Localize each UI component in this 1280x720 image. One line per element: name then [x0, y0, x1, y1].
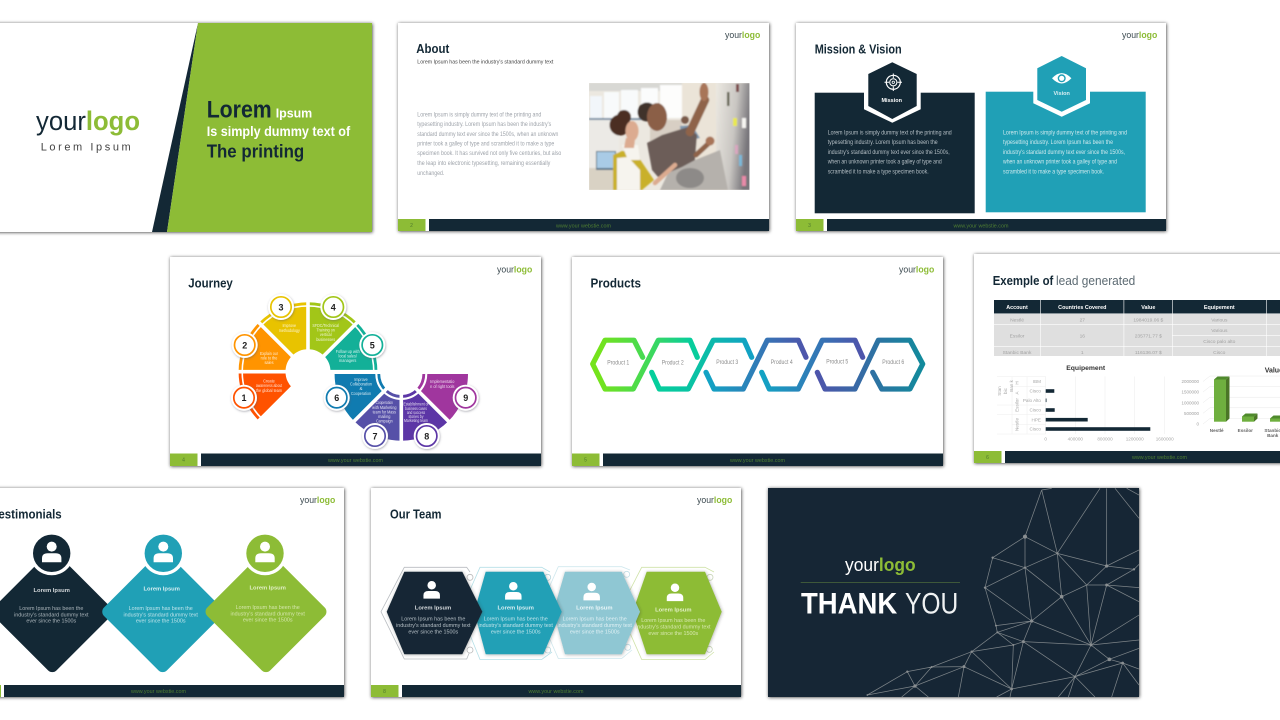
panel: vision: [986, 56, 1146, 212]
step captions: business cases: [405, 406, 427, 411]
teal diamond card: ever since the 1500s: [136, 619, 186, 625]
step captions: mailing: [378, 414, 391, 419]
team footer: [371, 685, 741, 697]
green team card: ever since the 1500s: [648, 631, 698, 637]
equipement bar chart: bic: [1003, 387, 1008, 394]
products footer: [572, 454, 943, 466]
panel: mission: [815, 62, 975, 213]
lead footer: www.your webstie.com: [1131, 455, 1187, 461]
mission footer: www.your webstie.com: [953, 223, 1009, 229]
equipement bar chart: 1200000: [1126, 437, 1144, 442]
leads table: 27: [1080, 318, 1085, 324]
product labels: Product 2: [662, 361, 684, 367]
step 5 badge: 5: [370, 340, 375, 350]
cover green panel: [167, 23, 372, 232]
step captions: awareness about: [256, 383, 283, 388]
dark diamond card: Lorem Ipsum: [33, 588, 70, 594]
step captions: businesses: [316, 337, 336, 342]
equipement bar chart: 0: [1044, 437, 1047, 442]
testimonials footer: [0, 685, 344, 697]
equipement bar chart: H: [1014, 381, 1020, 385]
slide 4: journey: [170, 257, 541, 466]
step captions: [256, 323, 455, 424]
journey diagram: nine-step S-curve: [231, 294, 479, 449]
step captions: vertical: [320, 332, 332, 337]
slide 6: lead generated: [974, 254, 1280, 463]
journey footer: www.your webstie.com: [327, 458, 383, 464]
step captions: managers: [339, 358, 357, 363]
value 3d column chart: 1000000: [1181, 400, 1199, 405]
icon: person: [505, 582, 522, 600]
green team card: Lorem Ipsum has been the: [641, 618, 705, 624]
step 4 badge: [320, 294, 346, 320]
lead title: Exemple of: [993, 273, 1054, 288]
step captions: Improve: [354, 377, 368, 382]
about photo: two colleagues at a wall: [589, 83, 750, 190]
cover headline: The printing: [207, 140, 304, 162]
teal diamond card: Lorem Ipsum: [143, 586, 180, 592]
mission title: Mission & Vision: [815, 41, 902, 56]
journey footer: 4: [182, 458, 185, 464]
slide 1: cover: [0, 23, 372, 232]
mission paragraph: industry's standard dummy text ever since the 1500s,: [828, 150, 950, 156]
lower ring steps 6 to 9: [335, 374, 468, 443]
icon: person: [42, 542, 61, 562]
equipement bar chart: Cisco: [1030, 427, 1041, 432]
product labels: Product 5: [826, 359, 849, 365]
step captions: Cooperation: [376, 400, 393, 405]
lead title: lead generated: [1056, 273, 1135, 288]
step 2 badge: [232, 332, 258, 358]
equipement bar chart: Nestle: [1014, 418, 1020, 431]
light blue team card: ever since the 1500s: [570, 629, 620, 635]
leads table: Stanbic Bank: [1003, 350, 1032, 356]
step captions: role to the: [261, 356, 278, 360]
icon: person: [667, 584, 683, 601]
thank you heading: YOU: [905, 588, 958, 620]
leads table: Account: [1006, 305, 1028, 311]
leads table: 116136.07 $: [1135, 350, 1162, 356]
step 8 badge: [414, 423, 440, 449]
testimonials logo: yourlogo: [300, 495, 335, 506]
journey title: Journey: [188, 276, 233, 290]
slide 5: products: [572, 257, 943, 466]
vision hexagon: [1037, 56, 1086, 112]
dark diamond card: industry's standard dummy text: [14, 612, 89, 618]
vision paragraph: Lorem Ipsum is simply dummy text of the printing and: [1003, 130, 1127, 136]
equipement bar chart: Cisco: [1030, 389, 1041, 394]
value 3d column chart: 0: [1196, 422, 1199, 427]
dark diamond card: [0, 531, 115, 675]
about logo: yourlogo: [725, 30, 760, 41]
green diamond card: Lorem Ipsum: [249, 586, 286, 592]
step captions: Explain our: [260, 351, 278, 356]
team footer: 8: [383, 689, 386, 695]
icon: target: [884, 74, 902, 91]
equipement bar chart: Ban k: [1009, 379, 1014, 392]
lead footer: [974, 451, 1280, 463]
vision paragraph: typesetting industry. Lorem Ipsum has been the: [1003, 140, 1114, 146]
equipement bar chart: HPE: [1032, 417, 1041, 422]
green team card: industry's standard dummy text: [636, 625, 711, 631]
step 3 badge: [268, 294, 294, 320]
about footer: 2: [410, 223, 413, 229]
leads table: Various: [1211, 328, 1228, 334]
green diamond card: industry's standard dummy text: [230, 611, 305, 617]
value 3d column chart: Essilor: [1238, 428, 1253, 433]
team footer: www.your webstie.com: [528, 689, 584, 695]
step 6 badge: [324, 385, 350, 411]
cover dark diagonal stripe: [152, 23, 198, 232]
leads table: Cisco: [1213, 350, 1226, 356]
vision label: Vision: [1053, 91, 1071, 97]
dark team card: ever since the 1500s: [408, 629, 458, 635]
value 3d column chart: 500000: [1184, 411, 1199, 416]
vision paragraph: when an unknown printer took a galley of type and: [1002, 160, 1117, 166]
value 3d column chart: Nestlé: [1210, 428, 1224, 433]
step captions: local sales/: [339, 354, 357, 358]
mission paragraph: when an unknown printer took a galley of type and: [827, 160, 942, 166]
equipement bar chart: Palo Alto: [1023, 398, 1041, 403]
cover logo: yourlogo: [36, 106, 140, 136]
product labels: Product 4: [771, 360, 793, 366]
step 1 badge: [231, 385, 257, 411]
leads table: Value: [1141, 305, 1155, 311]
dark team card: Lorem Ipsum has been the: [401, 616, 465, 622]
green diamond card: Lorem Ipsum has been the: [236, 605, 300, 611]
about paragraph: typesetting industry. Lorem Ipsum has been the industry's: [417, 122, 551, 128]
team title: Our Team: [390, 506, 442, 522]
step 8 badge: 8: [424, 431, 429, 441]
teal team card: industry's standard dummy text: [478, 623, 553, 629]
step 9 badge: [453, 385, 479, 411]
leads table: Nestlé: [1010, 318, 1024, 324]
dark diamond card: Lorem Ipsum has been the: [19, 606, 83, 612]
step captions: with Marketing: [372, 405, 397, 410]
vision paragraph: [1002, 130, 1127, 176]
value 3d column chart: [1181, 368, 1280, 438]
cover logo tagline: Lorem Ipsum: [41, 142, 131, 154]
step captions: Marketing team: [404, 418, 428, 423]
teal team card: ever since the 1500s: [491, 629, 541, 635]
step captions: team for Mass: [373, 410, 397, 414]
lead title: [993, 273, 1135, 288]
cover headline: [207, 96, 351, 162]
icon: person: [255, 542, 275, 562]
equipement bar chart: Essilor: [1014, 398, 1020, 412]
equipement bar chart: [997, 365, 1174, 442]
mission footer: 3: [808, 223, 811, 229]
leads table: Cisco palo alto: [1203, 339, 1236, 345]
step captions: Campaign: [376, 418, 393, 424]
step captions: SFDC/Technical: [312, 323, 339, 328]
equipement bar chart: A: [1014, 391, 1020, 395]
thank you logo: yourlogo: [845, 555, 916, 575]
light blue team card: industry's standard dummy text: [557, 623, 632, 629]
cover headline: Is simply dummy text of: [207, 123, 351, 139]
step 1 badge: 1: [241, 393, 247, 403]
vision paragraph: scrambled it to make a type specimen book.: [1003, 170, 1104, 176]
mission paragraph: Lorem Ipsum is simply dummy text of the printing and: [828, 130, 952, 136]
leads table: Equipement: [1204, 305, 1235, 311]
value 3d column chart: 2000000: [1181, 379, 1199, 384]
step captions: Collaboration: [350, 382, 372, 386]
leads table: 1984019.06 $: [1133, 318, 1164, 324]
dark team card: Lorem Ipsum: [415, 605, 451, 611]
about paragraph: specimen book. It has survived not only five centuries, but also: [417, 151, 562, 157]
step captions: Establishment of: [404, 402, 429, 406]
equipement bar chart: Equipement: [1066, 365, 1106, 372]
products logo: yourlogo: [899, 264, 934, 276]
products title: Products: [590, 276, 641, 290]
step 7 badge: [362, 423, 388, 449]
step captions: the global team: [256, 388, 282, 393]
value 3d column chart: 1500000: [1181, 390, 1199, 395]
teal team card: [470, 567, 562, 660]
leads table: 16: [1080, 334, 1085, 340]
slide 7: testimonials: [0, 488, 344, 697]
step 6 badge: 6: [334, 393, 339, 403]
about footer: [398, 219, 769, 231]
thank you heading: [801, 588, 958, 620]
step 7 badge: 7: [372, 431, 378, 441]
journey logo: yourlogo: [497, 264, 532, 276]
leads table: Essilor: [1010, 334, 1025, 340]
step 3 badge: 3: [278, 302, 284, 312]
step captions: &: [359, 386, 363, 391]
slide 8: our team: [371, 488, 741, 697]
product labels: [607, 359, 905, 367]
product labels: Product 1: [607, 361, 630, 367]
green team card: [630, 567, 722, 660]
about paragraph: printer took a galley of type and scrambled it to make a type: [417, 142, 555, 148]
teal team card: Lorem Ipsum: [497, 606, 534, 612]
vision paragraph: industry's standard dummy text ever since the 1500s,: [1003, 150, 1125, 156]
leads table: 1: [1081, 350, 1084, 356]
products footer: 5: [584, 458, 587, 464]
upper ring steps 1 to 5: [235, 298, 381, 423]
light blue team card: [548, 567, 640, 658]
equipement bar chart: IBM: [1033, 379, 1041, 384]
step 2 badge: 2: [242, 340, 247, 350]
mission paragraph: [827, 130, 952, 176]
mission paragraph: typesetting industry. Lorem Ipsum has been the: [828, 140, 938, 146]
mission hexagon: [868, 62, 917, 119]
about paragraph: Lorem Ipsum is simply dummy text of the printing and: [417, 112, 541, 118]
mission paragraph: scrambled it to make a type specimen book.: [828, 170, 929, 176]
slide 2: about: [398, 23, 769, 231]
step captions: Create: [263, 378, 275, 384]
leads table: Countries Covered: [1058, 305, 1106, 311]
mission footer: [796, 219, 1166, 231]
step captions: Improve: [282, 323, 297, 328]
leads table: Various: [1211, 318, 1228, 324]
icon: eye: [1052, 73, 1071, 83]
dark team card: [381, 567, 482, 659]
cover headline: Lorem: [207, 96, 272, 124]
step 4 badge: 4: [331, 302, 336, 312]
step captions: methodology: [279, 328, 300, 333]
network mesh: [866, 488, 1139, 697]
equipement bar chart: Stan: [997, 386, 1002, 396]
step 9 badge: 9: [463, 393, 468, 403]
about subtitle: Lorem Ipsum has been the industry's standard dummy text: [417, 60, 554, 66]
light blue team card: Lorem Ipsum: [576, 606, 613, 612]
cover headline: Ipsum: [276, 106, 312, 120]
equipement bar chart: 1600000: [1156, 437, 1174, 442]
step captions: sales: [264, 360, 274, 365]
equipement bar chart: Cisco: [1030, 408, 1041, 413]
team logo: yourlogo: [697, 495, 732, 506]
slide 9: thank you: [768, 488, 1139, 697]
journey footer: [170, 454, 541, 466]
icon: person: [154, 542, 173, 562]
teal diamond card: [100, 531, 226, 675]
about paragraph: standard dummy text ever since the 1500s, when an unknown: [417, 132, 558, 138]
equipement bar chart: 400000: [1068, 437, 1083, 442]
leads table: [994, 300, 1280, 356]
teal diamond card: industry's standard dummy text: [123, 612, 198, 618]
product labels: Product 6: [882, 360, 905, 366]
teal team card: Lorem Ipsum has been the: [484, 616, 548, 622]
icon: person: [423, 581, 440, 599]
step 5 badge: [359, 332, 385, 358]
about title: About: [416, 41, 450, 56]
green diamond card: [203, 531, 329, 675]
dark team card: industry's standard dummy text: [396, 623, 471, 629]
product labels: Product 3: [716, 360, 739, 366]
about paragraph: [417, 112, 562, 177]
value 3d column chart: Bank: [1267, 433, 1279, 438]
about footer: www.your webstie.com: [555, 223, 611, 229]
step captions: stories by: [408, 414, 424, 419]
mission logo: yourlogo: [1122, 30, 1157, 41]
about paragraph: the leap into electronic typesetting, remaining essentially: [417, 161, 550, 167]
mission label: Mission: [881, 98, 903, 104]
step captions: Training on: [317, 328, 335, 332]
step captions: Follow up with: [336, 349, 360, 354]
step captions: and success: [407, 410, 425, 415]
step captions: Cooperation: [351, 391, 371, 396]
equipement bar chart: 800000: [1097, 437, 1113, 442]
interlinked hexagon chain: [593, 340, 923, 389]
thank you heading: THANK: [801, 588, 898, 620]
dark diamond card: ever since the 1500s: [26, 619, 76, 625]
testimonials footer: www.your webstie.com: [130, 689, 186, 695]
leads table: 235771.77 $: [1135, 334, 1162, 340]
lead footer: 6: [986, 455, 989, 461]
step captions: n of right tools: [430, 384, 455, 389]
green diamond card: ever since the 1500s: [243, 618, 293, 624]
divider under logo: [801, 581, 960, 584]
about paragraph: unchanged.: [417, 171, 445, 177]
green team card: Lorem Ipsum: [655, 607, 692, 613]
products footer: www.your webstie.com: [729, 458, 785, 464]
light blue team card: Lorem Ipsum has been the: [563, 616, 627, 622]
slide 3: mission and vision: [796, 23, 1166, 231]
step captions: Implementatio: [430, 379, 455, 384]
teal diamond card: Lorem Ipsum has been the: [129, 606, 193, 612]
icon: person: [583, 583, 600, 600]
